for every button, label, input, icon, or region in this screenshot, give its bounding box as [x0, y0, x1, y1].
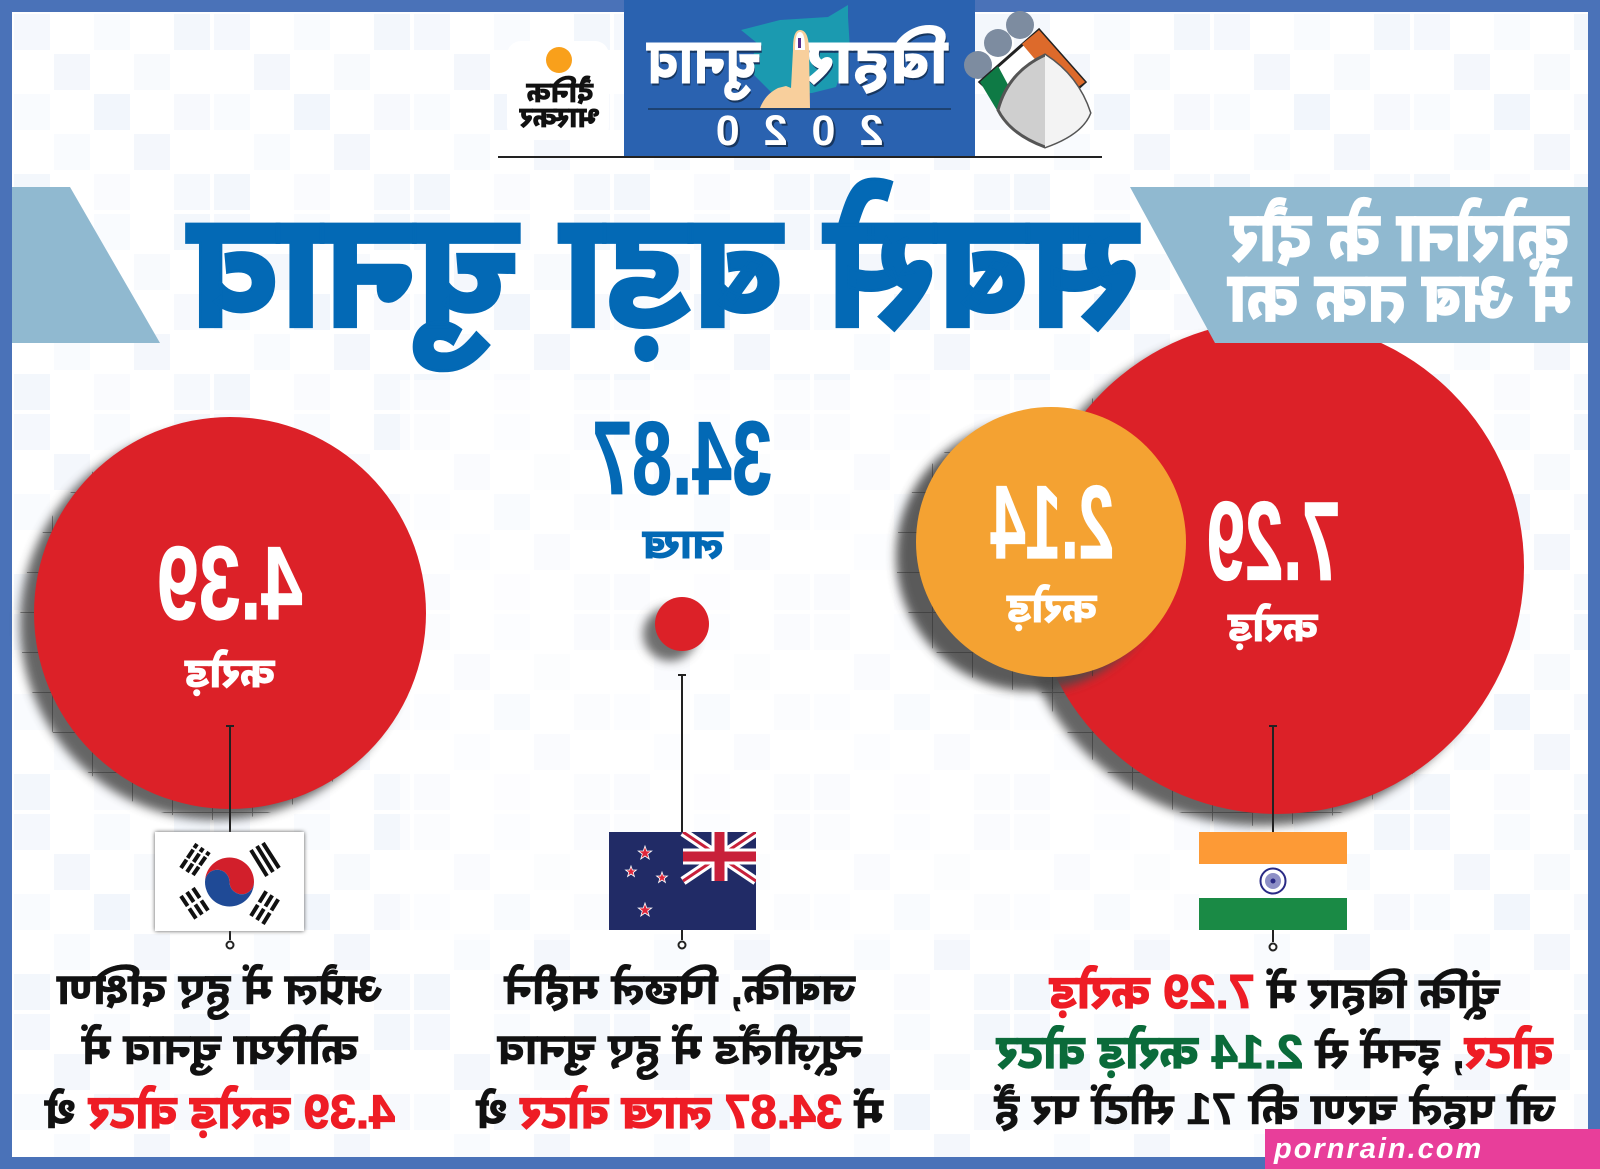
icon: Bihar map [741, 5, 850, 94]
orange circle shadow [896, 421, 1166, 691]
line 2: वोटर, इनमें से 2.14 करोड़ वोटर [997, 1025, 1553, 1078]
value: New Zealand [592, 401, 772, 567]
flag: India [1199, 832, 1347, 930]
line 2: न्यूज़ीलैंड में हुए चुनाव [498, 1025, 862, 1074]
small circle: New Zealand [655, 597, 709, 651]
ribbon: right [1130, 187, 1588, 343]
big circle: India total [1030, 320, 1524, 814]
line 1: चूंकि बिहार में 7.29 करोड़ [1050, 965, 1500, 1018]
ribbon: left [12, 187, 162, 343]
line 1: जबकि, पिछले महीने [504, 965, 856, 1014]
number: 2.14 [990, 465, 1114, 581]
logo wordmark: भास्कर [520, 102, 600, 134]
ribbon text [1226, 196, 1572, 324]
logo sun [546, 47, 572, 73]
line 2: कोरिया चुनाव में [82, 1025, 358, 1074]
number: 7.29 [1207, 480, 1340, 604]
small circle shadow [643, 607, 697, 661]
text block: New Zealand [476, 964, 884, 1138]
big circle shadow [1014, 332, 1508, 826]
ribbon text: में अब तक का [1229, 260, 1571, 337]
flag: New Zealand [609, 832, 756, 930]
line 1: अप्रैल में हुए दक्षिण [57, 965, 383, 1014]
number: 34.87 [592, 401, 772, 517]
text block: India [994, 965, 1556, 1134]
number: 4.39 [157, 526, 303, 642]
left circle shadow [20, 428, 412, 820]
header: election banner [624, 0, 975, 157]
header rule [498, 156, 1102, 158]
value: South Korea [157, 526, 303, 696]
logo wordmark: दैनिक [527, 77, 593, 109]
unit: करोड़ [1007, 584, 1097, 631]
main title: सबसे बड़ा चुनाव [189, 177, 1139, 362]
icon: ballot symbol with mask [964, 11, 1092, 149]
ribbon text: कोरोना के दौर [1231, 199, 1569, 276]
line 3: में 34.87 लाख वोटर थे [476, 1085, 884, 1138]
watermark strip: pornrain.com [1274, 1133, 1483, 1165]
banner title: second word: चुनाव [647, 24, 761, 97]
banner year: 2020 [692, 107, 883, 155]
line 3: 4.39 करोड़ वोटर थे [45, 1085, 395, 1138]
line 3: जो पहले चरण की 71 सीटों पर हैं [995, 1085, 1555, 1134]
header: logo card [507, 41, 609, 140]
left circle: South Korea [34, 417, 426, 809]
unit: करोड़ [1228, 603, 1318, 650]
value: India total [1207, 480, 1340, 650]
text block: South Korea [44, 964, 395, 1138]
logo wordmark [519, 76, 600, 134]
value: first phase [990, 465, 1114, 632]
unit: करोड़ [185, 649, 275, 696]
watermark strip [1265, 1129, 1600, 1169]
unit: लाख [643, 520, 723, 567]
icon: voting finger [760, 30, 810, 108]
flag: South Korea [152, 828, 308, 934]
banner rule [648, 108, 951, 110]
orange circle: first phase [916, 407, 1186, 677]
banner title: first word: बिहार [806, 24, 948, 97]
